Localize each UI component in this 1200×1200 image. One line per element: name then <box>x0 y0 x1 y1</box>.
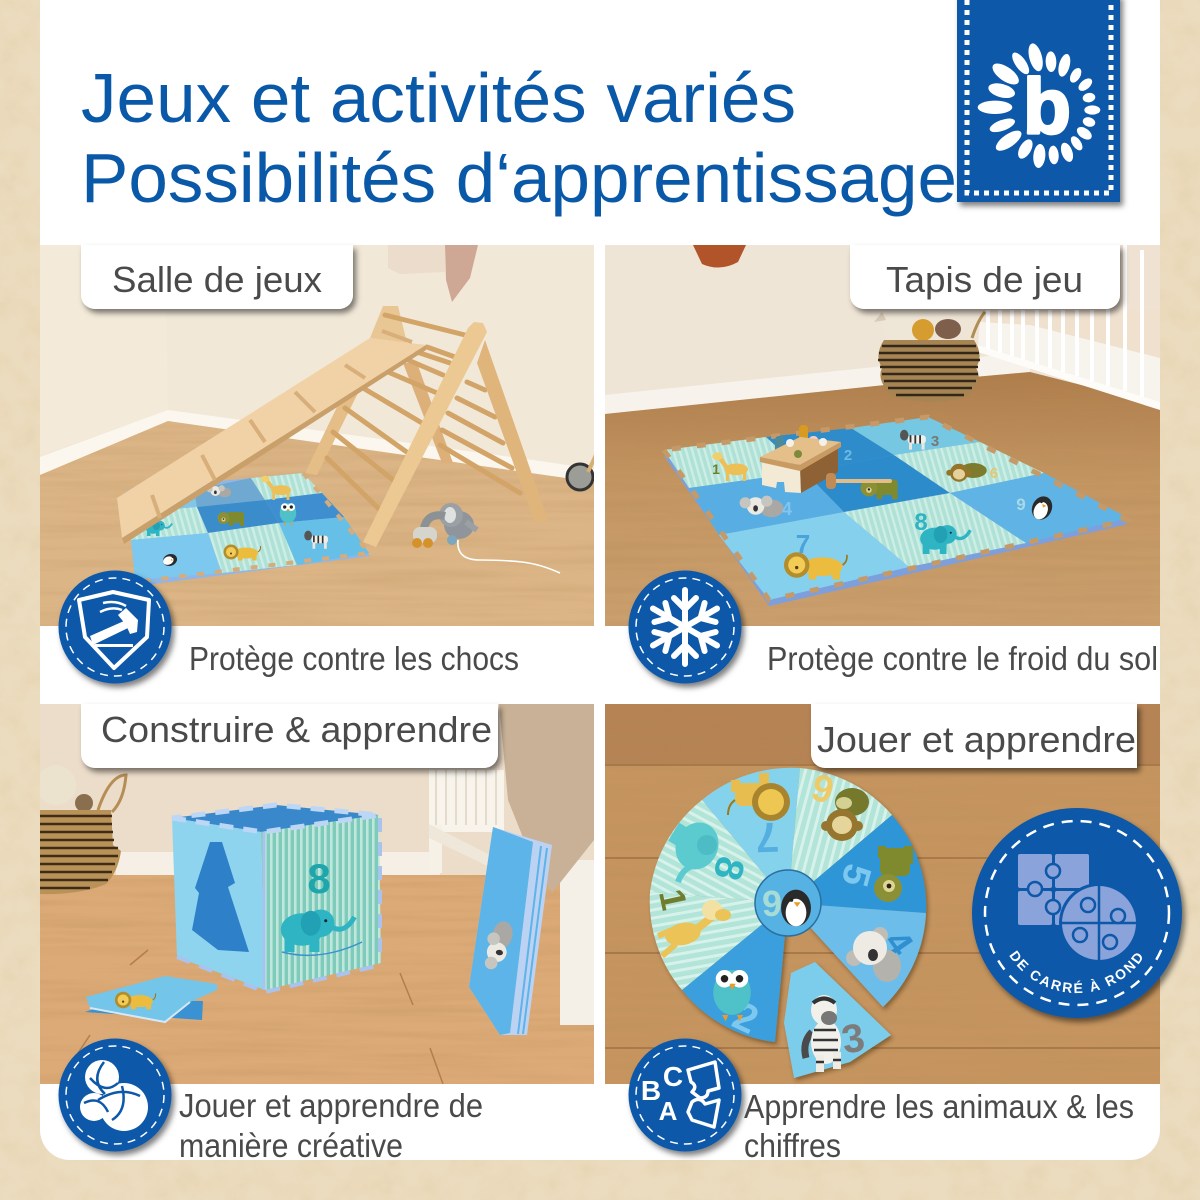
logo ribbon: b <box>1023 62 1071 150</box>
wooden hammer bench toy <box>760 425 892 493</box>
panel: jouer et apprendre photo <box>605 704 1160 1084</box>
centre disc with penguin <box>755 870 821 936</box>
panel: salle de jeux photo <box>40 245 596 626</box>
puzzle mat <box>127 473 370 586</box>
crib <box>978 245 1160 410</box>
puzzle mat <box>664 417 1128 606</box>
wooden slide <box>117 331 426 544</box>
title: Possibilités d‘apprentissage <box>81 139 957 217</box>
badge: snowflake icon <box>628 570 742 684</box>
caption: animaux et chiffres: chiffres <box>744 1127 841 1164</box>
wedge animal: giraffe <box>658 900 731 956</box>
badge: de carré à rond: DE CARRÉ À ROND <box>1009 950 1142 994</box>
puzzle mat: 1 <box>712 461 720 477</box>
label: construire et apprendre <box>81 704 498 768</box>
basket with plush toys <box>874 311 985 402</box>
caption: manière créative: manière créative <box>179 1127 403 1164</box>
label: tapis de jeu <box>850 245 1120 309</box>
wedge numbers: 8 <box>704 852 753 885</box>
puzzle mat: 7 <box>796 529 810 559</box>
foam cube <box>172 805 381 992</box>
badge: ABC puzzle icon: B <box>641 1075 661 1106</box>
wedge numbers: 3 <box>838 1015 868 1063</box>
loose foam tiles <box>85 976 217 1022</box>
title <box>81 59 957 217</box>
centre disc with penguin: 9 <box>762 883 782 924</box>
caption: animaux et chiffres <box>744 1088 1134 1164</box>
tricycle wheel <box>567 455 596 490</box>
foam cube: 8 <box>307 855 331 902</box>
puzzle mat: 6 <box>990 465 998 482</box>
panel: tapis de jeu photo <box>605 245 1160 626</box>
caption: chocs: Protège contre les chocs <box>189 640 519 677</box>
wedge numbers: 7 <box>755 814 780 861</box>
caption: manière créative <box>179 1087 483 1164</box>
wedge numbers: 1 <box>651 885 695 913</box>
badge: ABC puzzle icon: C <box>663 1061 683 1092</box>
wedge animal: elephant <box>668 822 718 883</box>
toy elephant <box>412 503 560 573</box>
badge: ABC puzzle icon <box>628 1038 742 1152</box>
panel: construire et apprendre photo <box>36 704 594 1084</box>
wedge numbers: 6 <box>807 765 839 811</box>
label: salle de jeux: Salle de jeux <box>112 259 322 300</box>
badge: balls icon <box>58 1038 172 1152</box>
label: tapis de jeu: Tapis de jeu <box>886 259 1083 300</box>
label: jouer et apprendre <box>811 704 1137 768</box>
wedge animal: bear <box>874 846 913 902</box>
badge: shield and hammer icon <box>58 570 172 684</box>
puzzle mat: 4 <box>782 499 792 519</box>
front ladder frame <box>363 322 548 547</box>
label: construire et apprendre: Construire & apprendre <box>101 709 492 750</box>
wedge numbers: 5 <box>833 859 879 891</box>
label: jouer et apprendre: Jouer et apprendre <box>817 719 1136 760</box>
caption: animaux et chiffres: Apprendre les animaux & les <box>744 1088 1134 1125</box>
puzzle mat: 9 <box>1016 495 1026 514</box>
caption: froid du sol: Protège contre le froid du sol <box>767 640 1158 677</box>
caption: manière créative: Jouer et apprendre de <box>179 1087 483 1124</box>
puzzle mat: 3 <box>931 433 939 450</box>
logo ribbon <box>957 0 1120 202</box>
puzzle mat: 8 <box>914 509 928 536</box>
back ladder frame and rungs <box>305 306 520 510</box>
wedge animal: owl <box>713 970 751 1021</box>
wedge numbers: 4 <box>877 923 922 963</box>
badge: de carré à rond <box>972 808 1189 1026</box>
wedge animal: zebra <box>805 995 841 1072</box>
wedge animal: monkey <box>821 788 869 841</box>
wedge numbers: 2 <box>726 994 765 1043</box>
puzzle square <box>1018 854 1089 925</box>
label: salle de jeux <box>81 245 353 309</box>
title: Jeux et activités variés <box>81 59 796 137</box>
puzzle circle <box>1059 883 1139 963</box>
garment on hanger <box>388 245 478 302</box>
basket with plush <box>36 765 126 894</box>
round puzzle made of wedges <box>650 768 926 1078</box>
wedge animal: lion <box>728 773 790 821</box>
wedge numbers <box>659 775 913 1052</box>
crib and blanket <box>429 704 594 1025</box>
hanger <box>693 245 746 268</box>
stack of foam tiles <box>469 827 552 1035</box>
badge: ABC puzzle icon: A <box>659 1096 678 1126</box>
wedge animal: koala <box>846 927 901 982</box>
puzzle mat: 2 <box>844 447 852 464</box>
